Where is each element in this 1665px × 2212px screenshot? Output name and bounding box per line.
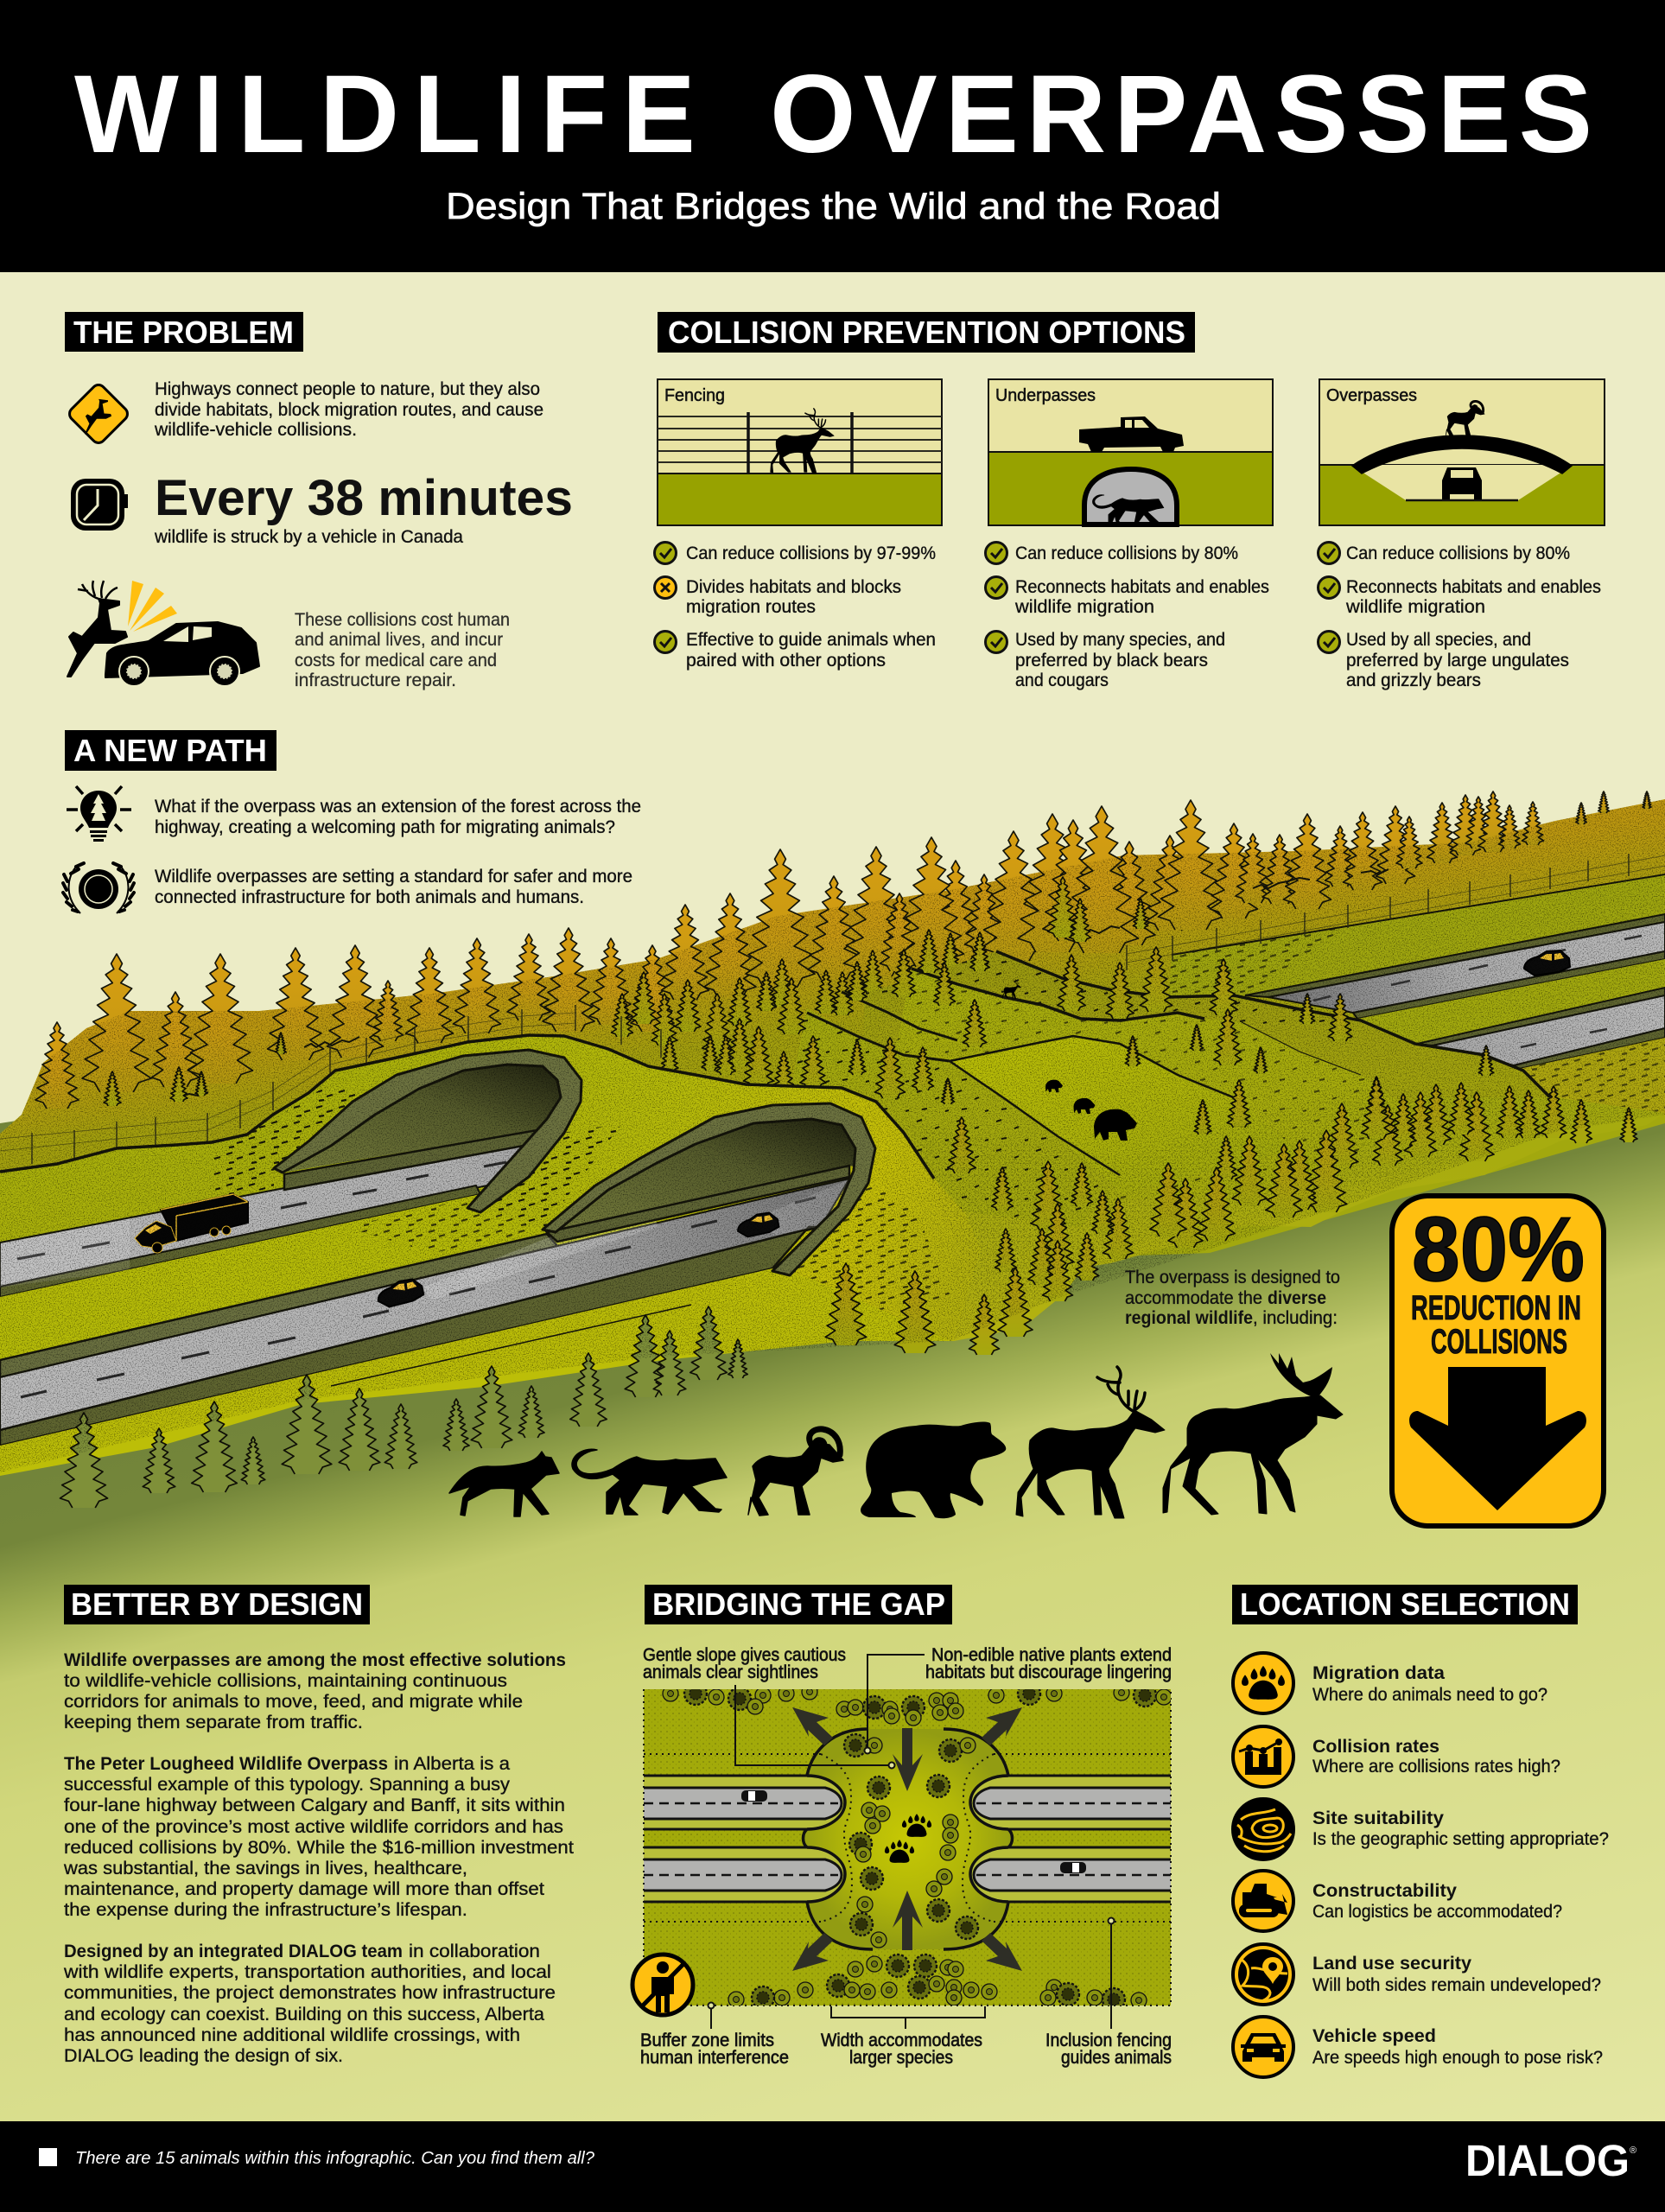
animals: moose	[1163, 1353, 1343, 1515]
plan: left lanes	[635, 1776, 845, 1902]
sign: 80% reduction in collisions: COLLISIONS	[1431, 1323, 1567, 1361]
text block: paragraph 1: Wildlife overpasses are among the most effective solutions	[64, 1650, 566, 1670]
heading: better by design: BETTER BY DESIGN	[71, 1586, 363, 1622]
callout: gentle slope: animals clear sightlines	[643, 1662, 818, 1682]
logo: DIALOG: ®	[1630, 2145, 1636, 2156]
item: collision rates	[1233, 1726, 1560, 1787]
overpass earth mass	[0, 1035, 981, 1341]
text: what if: What if the overpass was an extension of the forest across the	[155, 797, 641, 817]
bullets: overpasses: and grizzly bears	[1346, 671, 1481, 690]
text block: paragraph 3: DIALOG leading the design of six.	[64, 2046, 343, 2066]
subtitle: Design That Bridges the Wild and the Road	[446, 186, 1221, 227]
callout: buffer zone: Buffer zone limits	[640, 2031, 774, 2050]
bullets: overpasses: Reconnects habitats and enables	[1346, 577, 1601, 597]
far road A	[1245, 914, 1665, 1019]
footer band	[0, 2121, 1665, 2212]
plan: movement arrows	[792, 1707, 1022, 1971]
animals: elk	[1016, 1367, 1165, 1518]
bullets: fencing: migration routes	[686, 597, 816, 617]
callout: inclusion fencing	[1045, 2031, 1172, 2068]
text: diverse regional wildlife: , including:	[1253, 1308, 1338, 1328]
fences	[32, 854, 1629, 1164]
illustration: overpass landscape	[0, 778, 1665, 1508]
item: land use security	[1233, 1944, 1601, 2005]
text block: paragraph 2: reduced collisions by 80%. While the $16-million investment	[64, 1838, 574, 1858]
item: migration data	[1233, 1653, 1547, 1713]
stat: every 38 minutes: Every 38 minutes	[155, 470, 573, 526]
callout: width: Width accommodates	[821, 2031, 982, 2050]
item: constructability	[1233, 1871, 1562, 1931]
median between roads	[0, 1194, 543, 1360]
grain overlay	[0, 778, 1665, 1486]
plan: right lanes	[970, 1776, 1179, 1902]
text block: paragraph 1: corridors for animals to move, feed, and migrate while	[64, 1692, 523, 1712]
plan: cars	[741, 1790, 1086, 1873]
text: diverse regional wildlife: The overpass is designed to	[1125, 1268, 1340, 1287]
icon: light bulb with tree	[67, 786, 131, 842]
item: land use security: Will both sides remain undeveloped?	[1312, 1975, 1601, 1995]
title: OVERPASSES	[770, 53, 1592, 176]
item: constructability: Constructability	[1312, 1881, 1457, 1901]
text: diverse regional wildlife: regional wildlife	[1125, 1308, 1253, 1328]
item: site suitability	[1233, 1799, 1609, 1859]
stat caption: wildlife is struck by a vehicle in Canada	[154, 527, 463, 547]
road 1	[0, 1142, 531, 1297]
plan diagram: overpass from above	[635, 1682, 1179, 2011]
heading: collision prevention options: COLLISION PREVENTION OPTIONS	[668, 315, 1185, 350]
tunnel 2 headwall	[547, 1166, 849, 1242]
hill shading stipple and dashes	[212, 1084, 363, 1197]
text: diverse regional wildlife: accommodate the	[1125, 1288, 1262, 1308]
foreground negative-space trees	[60, 1306, 747, 1508]
back row of trees	[35, 791, 1651, 1109]
bullets: overpasses: wildlife migration	[1345, 597, 1485, 617]
bullets: underpasses: and cougars	[1015, 671, 1109, 690]
car in tunnel 2	[737, 1212, 779, 1237]
animals: cougar	[572, 1449, 727, 1515]
text: setting a standard: connected infrastructure for both animals and humans.	[155, 887, 584, 907]
bullets: fencing: Effective to guide animals when	[686, 630, 936, 650]
car on far road	[1524, 950, 1570, 976]
callout: gentle slope	[643, 1645, 846, 1682]
icon: deer and car collision	[67, 581, 259, 686]
callout: inclusion fencing: guides animals	[1061, 2048, 1172, 2068]
item: migration data: Where do animals need to go?	[1312, 1685, 1547, 1705]
text block: paragraph 2: four-lane highway between Calgary and Banff, it sits within	[64, 1796, 565, 1815]
title: WILDLIFE	[74, 53, 696, 176]
text: diverse regional wildlife	[1125, 1268, 1340, 1328]
callout: non-edible plants: habitats but discourage lingering	[925, 1662, 1172, 1682]
text block: paragraph 2	[63, 1754, 574, 1920]
road 2	[0, 1179, 849, 1446]
bullets: underpasses: wildlife migration	[1014, 597, 1154, 617]
foreground ground below road	[0, 1268, 950, 1476]
bullets: underpasses: preferred by black bears	[1015, 651, 1208, 671]
item: collision rates: Where are collisions rates high?	[1312, 1757, 1560, 1777]
bullets: fencing: Divides habitats and blocks	[686, 577, 901, 597]
bullets: overpasses: Used by all species, and	[1346, 630, 1531, 650]
car on road 2	[377, 1278, 424, 1308]
text block: paragraph 3: and ecology can coexist. Building on this success, Alberta	[64, 2005, 544, 2024]
bullets: underpasses: Reconnects habitats and enables	[1015, 577, 1269, 597]
text: highways	[154, 379, 543, 440]
item: site suitability: Is the geographic setting appropriate?	[1312, 1829, 1609, 1849]
arch ring 1	[274, 1050, 581, 1212]
bullets: overpasses	[1319, 543, 1601, 690]
animals on hillside: deer and bears	[1002, 979, 1137, 1141]
callout: non-edible plants	[925, 1645, 1172, 1682]
understory trees	[104, 877, 1148, 1106]
text: setting a standard: Wildlife overpasses are setting a standard for safer and more	[155, 867, 632, 887]
bullets: underpasses: Can reduce collisions by 80%	[1015, 543, 1238, 563]
bullets: fencing	[655, 543, 936, 671]
valley strip	[791, 1008, 1120, 1227]
text: collision costs	[295, 610, 510, 690]
heading: location selection: LOCATION SELECTION	[1240, 1586, 1570, 1622]
scribble undergrowth	[177, 869, 1389, 1097]
olive gradient background behind lower half	[0, 864, 1665, 2212]
text: collision costs: These collisions cost human	[295, 610, 510, 630]
bullets: underpasses	[985, 543, 1269, 690]
sign: 80% reduction in collisions: REDUCTION IN	[1411, 1289, 1581, 1327]
item: vehicle speed: Are speeds high enough to pose risk?	[1312, 2048, 1603, 2068]
ground below far road	[1519, 1038, 1665, 1115]
panel: underpasses	[988, 379, 1273, 525]
panel: overpasses	[1319, 379, 1605, 525]
item: collision rates: Collision rates	[1312, 1737, 1439, 1757]
logo: DIALOG: DIALOG	[1465, 2136, 1630, 2185]
text block: paragraph 2: in Alberta is a	[394, 1754, 510, 1774]
mid hill small trees	[675, 930, 1494, 1173]
item: land use security: Land use security	[1312, 1954, 1471, 1974]
text block: paragraph 1: keeping them separate from traffic.	[64, 1713, 363, 1732]
text block: paragraph 3	[63, 1942, 556, 2066]
text: highways: divide habitats, block migration routes, and cause	[155, 400, 543, 420]
panel: overpasses: Overpasses	[1326, 386, 1417, 405]
plan: overpass deck	[804, 1729, 1013, 1949]
panel: underpasses: Underpasses	[995, 386, 1096, 405]
bright bear hill	[950, 1036, 1296, 1192]
animals: bighorn sheep	[748, 1429, 843, 1516]
bullets: underpasses: Used by many species, and	[1015, 630, 1225, 650]
callout: buffer zone	[640, 2031, 789, 2068]
plan: paw prints	[885, 1814, 931, 1863]
text: setting a standard	[155, 867, 632, 907]
plan: plantings	[663, 1682, 1172, 2011]
text block: paragraph 2: the expense during the infrastructure’s lifespan.	[64, 1900, 467, 1920]
footer checkbox	[39, 2148, 57, 2166]
item: constructability: Can logistics be accommodated?	[1312, 1902, 1562, 1922]
icon: laurel medal	[63, 863, 134, 913]
text: what if	[155, 797, 641, 837]
header band	[0, 0, 1665, 272]
text: what if: highway, creating a welcoming path for migrating animals?	[155, 817, 615, 837]
animals: coyote	[449, 1452, 559, 1516]
hill layer 1	[864, 951, 1550, 1210]
panel: fencing: Fencing	[664, 386, 725, 405]
leader lines	[709, 1655, 1115, 2029]
sign: 80% reduction in collisions	[1392, 1196, 1604, 1526]
text: highways: Highways connect people to nature, but they also	[155, 379, 540, 399]
text: collision costs: infrastructure repair.	[295, 671, 456, 690]
callout: width: larger species	[849, 2048, 953, 2068]
text: collision costs: and animal lives, and incur	[295, 630, 503, 650]
plan: fence dotted lines	[644, 1689, 1171, 2005]
callout: gentle slope: Gentle slope gives cautious	[643, 1645, 846, 1665]
item: vehicle speed	[1233, 2017, 1603, 2077]
truck	[135, 1194, 248, 1253]
text block: paragraph 3: with wildlife experts, transportation authorities, and local	[63, 1962, 551, 1982]
text: highways: wildlife-vehicle collisions.	[154, 420, 357, 440]
callout: width	[821, 2031, 982, 2068]
callout: inclusion fencing: Inclusion fencing	[1045, 2031, 1172, 2050]
animals: bear	[861, 1422, 1006, 1518]
item: migration data: Migration data	[1312, 1663, 1445, 1683]
callout: buffer zone: human interference	[640, 2048, 789, 2068]
text block: paragraph 1: to wildlife-vehicle collisions, maintaining continuous	[64, 1671, 507, 1691]
text block: paragraph 3: Designed by an integrated DIALOG team	[64, 1942, 403, 1961]
callout: non-edible plants: Non-edible native plants extend	[931, 1645, 1172, 1665]
heading: a new path: A NEW PATH	[73, 733, 267, 768]
lower right conifer cluster	[825, 1078, 1637, 1355]
text block: paragraph 2: successful example of this typology. Spanning a busy	[64, 1775, 511, 1795]
text block: paragraph 2: The Peter Lougheed Wildlife Overpass	[64, 1754, 388, 1774]
text block: paragraph 2: was substantial, the savings in lives, healthcare,	[63, 1859, 467, 1878]
text block: paragraph 3: communities, the project demonstrates how infrastructure	[64, 1983, 556, 2003]
heading: bridging the gap: BRIDGING THE GAP	[652, 1586, 945, 1622]
far median	[1357, 959, 1665, 1044]
text block: paragraph 1	[64, 1650, 566, 1732]
bullets: fencing: Can reduce collisions by 97-99%	[686, 543, 936, 563]
tunnel 1 interior	[283, 1065, 561, 1173]
arch ring 2	[543, 1103, 875, 1275]
text block: paragraph 2: one of the province’s most active wildlife corridors and has	[64, 1817, 563, 1837]
far fence base	[1168, 874, 1665, 997]
tunnel 1 headwall	[284, 1128, 547, 1190]
bullets: overpasses: preferred by large ungulates	[1346, 651, 1569, 671]
bullets: overpasses: Can reduce collisions by 80%	[1346, 543, 1570, 563]
tunnel 2 interior	[556, 1119, 855, 1232]
item: site suitability: Site suitability	[1312, 1808, 1444, 1828]
forest hillside	[0, 799, 1665, 1296]
text block: paragraph 3: has announced nine additional wildlife crossings, with	[64, 2025, 520, 2045]
text block: paragraph 3: in collaboration	[409, 1942, 540, 1961]
panel: fencing	[658, 379, 942, 525]
icon: no people sign	[632, 1955, 693, 2015]
hill layer 2	[864, 969, 1417, 1210]
text: collision costs: costs for medical care and	[295, 651, 497, 671]
icon: clock	[71, 479, 128, 531]
far road B	[1417, 988, 1665, 1069]
sign: 80% reduction in collisions: 80%	[1412, 1198, 1585, 1300]
bullets: fencing: paired with other options	[686, 651, 886, 671]
item: vehicle speed: Vehicle speed	[1312, 2026, 1436, 2046]
text: diverse regional wildlife: diverse	[1268, 1288, 1326, 1308]
lower right wooded slope	[864, 1097, 1665, 1341]
footer note: There are 15 animals within this infographic. Can you find them all?	[75, 2149, 595, 2168]
heading: the problem: THE PROBLEM	[73, 315, 294, 350]
icon: deer crossing sign	[67, 382, 130, 446]
title	[74, 53, 1592, 176]
text block: paragraph 2: maintenance, and property damage will more than offset	[64, 1879, 544, 1899]
